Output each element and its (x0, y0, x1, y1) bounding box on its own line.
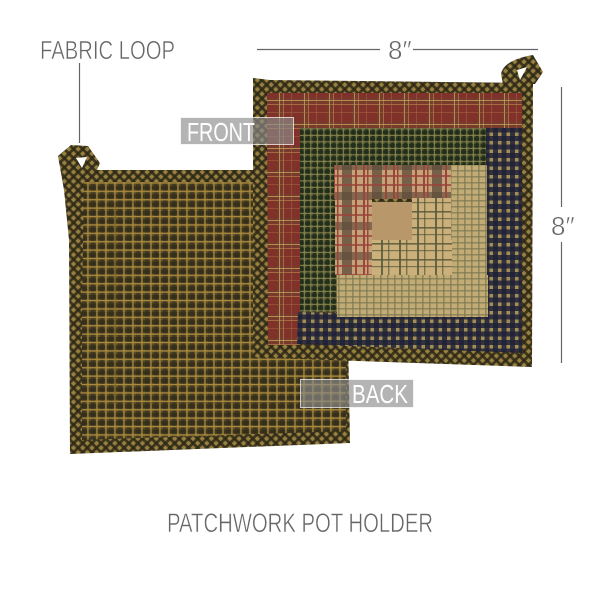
back pot holder (58, 145, 350, 454)
navy strip right (486, 128, 522, 318)
back plaid panel (82, 182, 346, 440)
label: back: BACK (352, 379, 409, 409)
tan strip bottom (337, 275, 488, 317)
label: fabric loop (40, 37, 175, 143)
center tan square (372, 202, 412, 240)
label: front: FRONT (187, 117, 255, 147)
front fabric loop (501, 55, 543, 84)
height dimension: 8″ (551, 211, 575, 241)
check strip bottom (372, 240, 452, 275)
back loop hole (76, 157, 87, 168)
title: PATCHWORK POT HOLDER (167, 508, 433, 538)
label: back (300, 379, 414, 409)
front loop hole (517, 67, 527, 80)
back binding with loop tail (58, 145, 350, 454)
navy strip bottom (297, 312, 522, 353)
label: fabric loop: FABRIC LOOP (40, 37, 175, 65)
width dimension: 8″ (388, 35, 412, 65)
plaid strip left (335, 199, 372, 275)
plaid strip top (334, 165, 451, 199)
back quilting lines (115, 202, 346, 403)
pointer line to loop (78, 63, 80, 143)
red strip top (267, 93, 522, 128)
front pot holder (253, 55, 543, 367)
check strip right (412, 198, 451, 240)
green strip top (300, 128, 486, 165)
red strip left (267, 128, 300, 345)
tan strip right (451, 165, 487, 275)
front binding (253, 78, 533, 367)
green strip left (300, 165, 337, 312)
